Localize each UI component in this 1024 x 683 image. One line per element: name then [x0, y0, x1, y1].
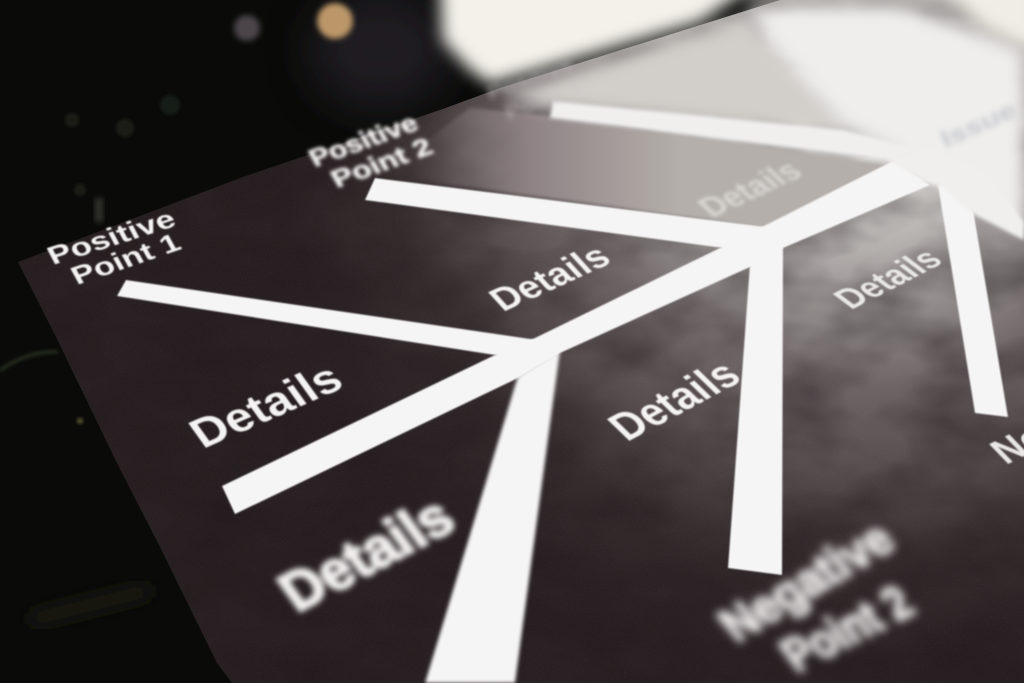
label: Details 2 (upper left): Details: [480, 237, 619, 318]
label: Details 4 (right): Details: [825, 243, 951, 315]
label: Positive Point 1: [42, 204, 186, 290]
label: Positive Point 3: Point 3: [502, 77, 585, 125]
rib: positive point 1: [117, 280, 537, 358]
label: Positive Point 1: Point 1: [65, 227, 186, 290]
label: Details 5 (far top): Details: [690, 154, 810, 223]
label: Positive Point 2: Positive: [304, 109, 423, 172]
label: Positive Point 2: [304, 109, 438, 193]
rib: negative point 3: [938, 180, 1008, 417]
label: Details 6 (blurred bottom): Details: [267, 486, 466, 624]
fishbone hub and far right rib: [885, 148, 1024, 240]
overexposed paper at top right: [745, 8, 1024, 232]
fishbone: spine: [222, 160, 930, 514]
label: Positive Point 3: Positive: [484, 53, 576, 105]
paper cell above rib 3: [500, 20, 860, 132]
label: Details 3 (center): Details: [598, 352, 751, 449]
rib: positive point 3: [550, 101, 920, 160]
paper cell between ribs 2 and 3: [380, 108, 891, 227]
label: Positive Point 3: [484, 53, 585, 125]
label: Negative Point 2: Point 2: [769, 575, 924, 682]
rib: negative point 1: [425, 350, 560, 683]
rib: positive point 2: [365, 178, 765, 250]
rib: negative point 2: [728, 246, 783, 575]
label: Details 1 (lower left): Details: [181, 355, 352, 457]
label: Positive Point 1: Positive: [42, 204, 181, 270]
label: top right heading (faint): Issue: [936, 96, 1021, 153]
label: Positive Point 2: Point 2: [326, 133, 438, 193]
label: Negative Point 2: Negative: [707, 511, 905, 651]
blurred white cloth at top: [440, 0, 1024, 84]
